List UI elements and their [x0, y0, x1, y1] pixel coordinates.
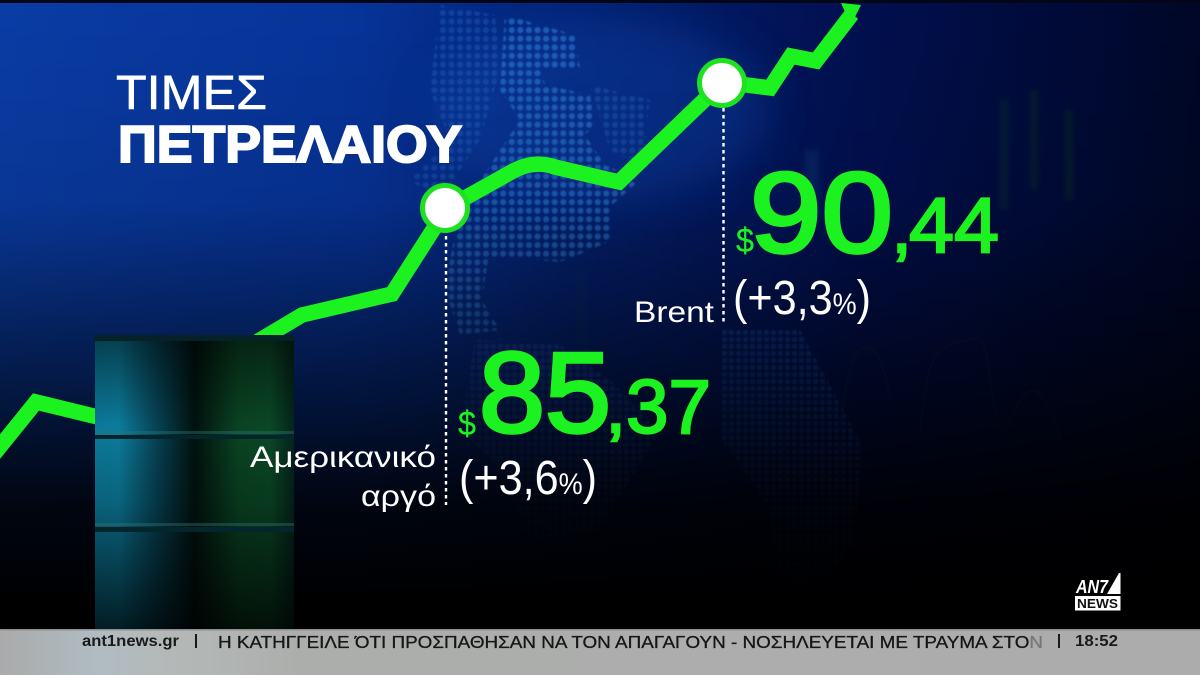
- top black edge: [0, 0, 1200, 3]
- price: Brent: [736, 150, 999, 277]
- marker: Brent: [700, 60, 744, 106]
- dashed leader: Brent: [722, 108, 725, 323]
- title: ΠΕΤΡΕΛΑΙΟΥ: [118, 116, 462, 174]
- price: Brent: 44: [909, 181, 999, 269]
- oil barrel: [94, 335, 295, 637]
- faint wave line: [840, 338, 1060, 440]
- logo: ANT1 News: NEWS: [1077, 596, 1118, 611]
- title: ΤΙΜΕΣ: [116, 67, 267, 120]
- price: American crude: 37: [626, 365, 711, 450]
- label: American crude: [250, 441, 436, 513]
- title: [116, 67, 462, 174]
- label: Brent: Brent: [634, 296, 715, 329]
- label: American crude: αργό: [361, 480, 436, 513]
- news ticker bar: 18:52: [1075, 633, 1118, 650]
- faded candlesticks and waves: [580, 90, 1073, 370]
- news ticker bar: [0, 629, 1200, 675]
- change: Brent: (+3,3%): [733, 272, 871, 325]
- change: American crude: (+3,6%): [459, 452, 597, 505]
- price: American crude: $: [458, 405, 476, 443]
- news ticker bar: Η ΚΑΤΗΓΓΕΙΛΕ ΌΤΙ ΠΡΟΣΠΑΘΗΣΑΝ ΝΑ ΤΟΝ ΑΠΑΓΑΓΟΥΝ - ΝΟΣΗΛΕΥΕΤΑΙ ΜΕ ΤΡΑΥΜΑ ΣΤΟ Ν: [218, 632, 1043, 652]
- price: Brent: $: [736, 222, 754, 260]
- green rising line chart with arrow: [0, 3, 861, 454]
- news ticker bar: ant1news.gr: [82, 633, 179, 650]
- price: American crude: ,: [606, 369, 625, 447]
- marker: American crude: [422, 186, 468, 230]
- dashed leader: American crude: [445, 236, 447, 505]
- price: Brent: 90: [750, 150, 893, 277]
- price: American crude: [458, 330, 711, 457]
- logo: ANT1 News: [1075, 573, 1120, 611]
- logo: ANT1 News: AN7: [1075, 577, 1109, 597]
- world map of dots: [410, 5, 860, 620]
- price: Brent: ,: [892, 189, 911, 267]
- label: American crude: Αμερικανικό: [250, 441, 436, 474]
- price: American crude: 85: [479, 330, 611, 457]
